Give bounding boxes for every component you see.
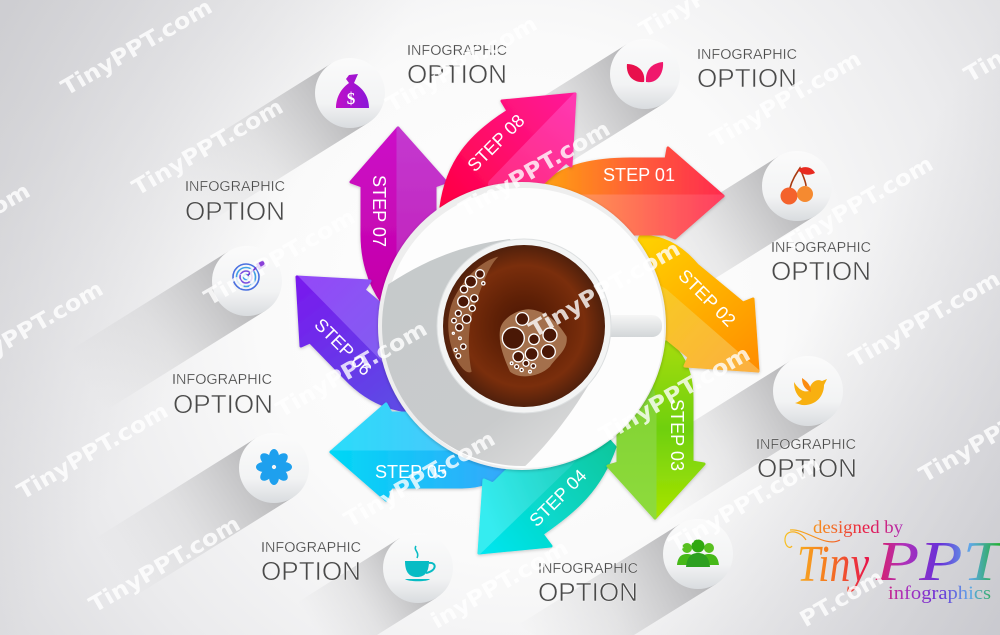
watermark: TinyPPT.com: TinyPPT.com xyxy=(845,267,1000,373)
arrow: step 02: STEP 02 xyxy=(674,265,740,331)
watermark: TinyPPT.com: TinyPPT.com xyxy=(455,117,615,223)
option label: left upper xyxy=(185,178,285,226)
arrow: step 08: STEP 08 xyxy=(463,110,529,176)
logo: designed by TinyPPT infographics: Tiny xyxy=(797,536,870,593)
coffee surface xyxy=(443,245,605,407)
option label: left upper: OPTION xyxy=(185,196,285,226)
option label: bottom left: INFOGRAPHIC xyxy=(261,539,361,556)
logo: designed by TinyPPT infographics: infographics xyxy=(888,583,991,604)
option label: left lower xyxy=(172,371,273,419)
arrow: step 02 xyxy=(630,237,758,371)
logo: designed by TinyPPT infographics: PPT xyxy=(875,531,1000,593)
icon disc: coffee cup xyxy=(383,533,453,603)
option label: right upper xyxy=(771,239,871,286)
icon disc: flower xyxy=(239,433,309,503)
watermark: TinyPPT.com: TinyPPT.com xyxy=(382,12,542,118)
icon disc: money bag xyxy=(315,58,385,128)
arrow: step 07: STEP 07 xyxy=(369,175,389,247)
watermark: TinyPPT.com: TinyPPT.com xyxy=(128,95,288,201)
option label: left lower: OPTION xyxy=(173,389,273,419)
watermark: TinyPPT.com: TinyPPT.com xyxy=(525,237,685,343)
option label: top centre: OPTION xyxy=(407,59,507,89)
coffee cup on saucer xyxy=(370,182,666,480)
option label: bottom centre xyxy=(538,560,638,607)
arrow: step 04 xyxy=(479,430,615,553)
icon disc: money bag: $ xyxy=(347,89,356,108)
logo: designed by TinyPPT infographics xyxy=(785,517,1000,604)
watermark: TinyPPT.com: TinyPPT.com xyxy=(57,0,217,101)
option label: bottom centre: OPTION xyxy=(538,577,638,607)
option label: left upper: INFOGRAPHIC xyxy=(185,178,285,195)
watermark: TinyPPT.com: TinyPPT.com xyxy=(665,452,825,558)
arrow: step 05 xyxy=(331,404,520,500)
watermark: TinyPPT.com: TinyPPT.com xyxy=(595,342,755,448)
arrow: step 03 xyxy=(608,340,704,518)
saucer xyxy=(370,182,666,480)
arrow: step 06: STEP 06 xyxy=(310,314,376,380)
watermark: TinyPPT.com: TinyPPT.com xyxy=(340,427,500,533)
arrow: step 03: STEP 03 xyxy=(667,399,687,471)
watermark: TinyPPT.com: TinyPPT.com xyxy=(13,399,173,505)
icon disc: leaves xyxy=(610,39,680,109)
option label: bottom centre: INFOGRAPHIC xyxy=(538,560,638,577)
option label: bottom left: OPTION xyxy=(261,556,361,586)
watermark: TinyPPT.com: inyPPT.com xyxy=(427,536,573,634)
icon disc: cherries xyxy=(762,151,832,221)
arrow: step 01 xyxy=(545,148,723,238)
watermark: TinyPPT.com: TinyPPT.com xyxy=(778,152,938,258)
watermark: TinyPPT.com: TinyPPT.com xyxy=(85,512,245,618)
icon disc: target xyxy=(212,246,282,316)
option label: right lower: INFOGRAPHIC xyxy=(756,436,856,453)
option label: right lower: OPTION xyxy=(757,453,857,483)
arrow: step 04: STEP 04 xyxy=(525,465,591,531)
option label: top centre xyxy=(407,42,507,89)
arrow: step 07 xyxy=(351,128,446,302)
logo: designed by TinyPPT infographics: designed by xyxy=(813,517,903,537)
option label: right upper: INFOGRAPHIC xyxy=(771,239,871,256)
cup rim xyxy=(437,239,611,413)
icon disc: people xyxy=(663,519,733,589)
watermark: TinyPPT.com: TinyPPT.com xyxy=(272,317,432,423)
icon disc: bird xyxy=(773,356,843,426)
option label: right upper: OPTION xyxy=(771,256,871,286)
cup handle xyxy=(600,315,662,337)
option label: right lower xyxy=(756,436,857,483)
bubbles xyxy=(452,270,557,373)
foam patches xyxy=(448,257,498,372)
option label: top right xyxy=(697,46,797,93)
long shadows behind icon discs xyxy=(67,44,827,635)
watermark: TinyPPT.com: TinyPPT.com xyxy=(706,47,866,153)
option label: top right: INFOGRAPHIC xyxy=(697,46,797,63)
arrow: step 08 xyxy=(441,94,575,230)
watermark: TinyPPT.com: PT.com xyxy=(796,565,888,633)
arrow: step 05: STEP 05 xyxy=(375,462,447,482)
option label: top right: OPTION xyxy=(697,63,797,93)
arrow: step 01: STEP 01 xyxy=(603,165,675,185)
option label: top centre: INFOGRAPHIC xyxy=(407,42,507,59)
option label: bottom left xyxy=(261,539,361,586)
option label: left lower: INFOGRAPHIC xyxy=(172,371,272,388)
watermark: TinyPPT.com: TinyPPT.com xyxy=(200,205,360,311)
arrow: step 06 xyxy=(297,277,430,411)
